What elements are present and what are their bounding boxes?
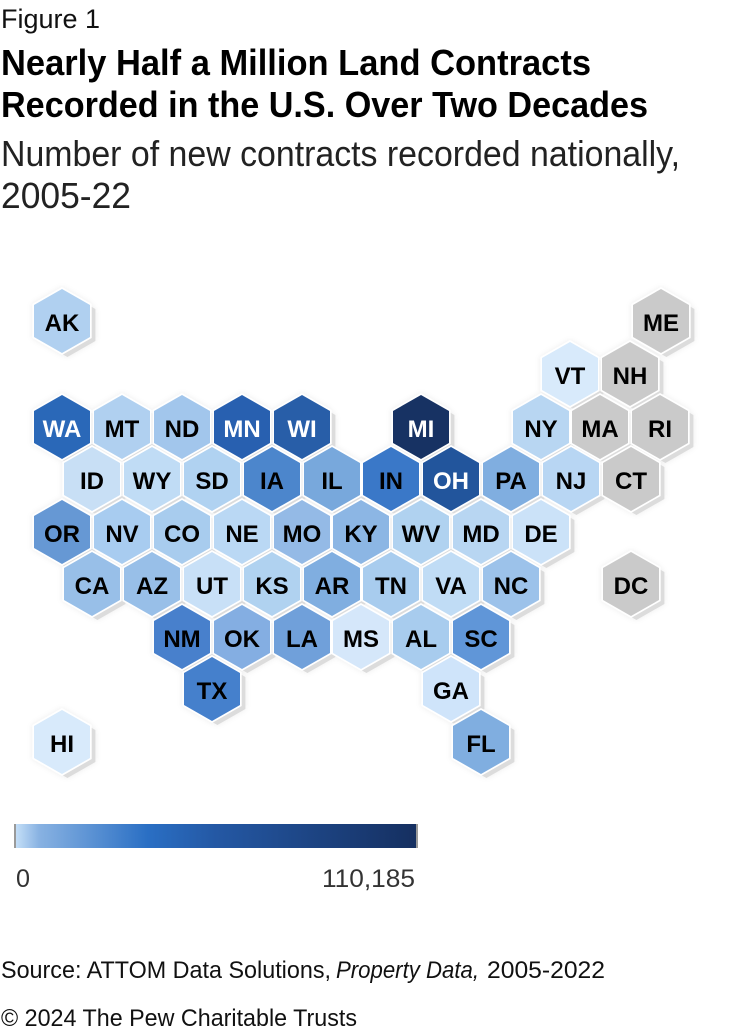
NH: NH bbox=[613, 363, 647, 390]
WY: WY bbox=[133, 468, 171, 495]
source: 2005-2022 bbox=[487, 957, 605, 984]
GA bbox=[423, 657, 484, 725]
WY bbox=[124, 447, 185, 515]
legend gradient bar bbox=[14, 824, 418, 848]
PA: PA bbox=[495, 468, 527, 495]
MA bbox=[572, 395, 633, 463]
PA bbox=[483, 447, 544, 515]
NC: NC bbox=[494, 573, 528, 600]
IA: IA bbox=[260, 468, 284, 495]
WV bbox=[393, 500, 454, 568]
HI bbox=[34, 710, 95, 778]
WV: WV bbox=[402, 521, 440, 548]
IL bbox=[304, 447, 365, 515]
HI: HI bbox=[50, 731, 74, 758]
legend maximum: 110,185 bbox=[322, 865, 415, 893]
copyright: © 2024 The Pew Charitable Trusts bbox=[1, 1005, 357, 1032]
WI: WI bbox=[287, 416, 317, 443]
AR bbox=[304, 552, 365, 620]
VT: VT bbox=[555, 363, 586, 390]
FL: FL bbox=[466, 731, 496, 758]
NM bbox=[154, 605, 215, 673]
MT: MT bbox=[105, 416, 140, 443]
ME: ME bbox=[643, 310, 679, 337]
title: Nearly Half a Million Land Contracts bbox=[1, 42, 591, 83]
MI bbox=[393, 395, 454, 463]
ME bbox=[633, 289, 694, 357]
KY: KY bbox=[344, 521, 378, 548]
LA: LA bbox=[286, 626, 318, 653]
AR: AR bbox=[315, 573, 349, 600]
MA: MA bbox=[581, 416, 619, 443]
AZ bbox=[124, 552, 185, 620]
AZ: AZ bbox=[136, 573, 168, 600]
WA bbox=[34, 395, 95, 463]
TX: TX bbox=[197, 678, 227, 705]
SC bbox=[453, 605, 514, 673]
RI bbox=[632, 395, 693, 463]
TX bbox=[184, 657, 245, 725]
ND: ND bbox=[165, 416, 199, 443]
OR: OR bbox=[44, 521, 80, 548]
CA: CA bbox=[75, 573, 109, 600]
NC bbox=[483, 552, 544, 620]
NJ bbox=[543, 447, 604, 515]
MO: MO bbox=[283, 521, 321, 548]
subtitle: Number of new contracts recorded nationally, bbox=[1, 133, 680, 174]
TN: TN bbox=[375, 573, 407, 600]
hexagon tile map bbox=[34, 289, 694, 778]
WA: WA bbox=[43, 416, 81, 443]
ID: ID bbox=[80, 468, 104, 495]
IN: IN bbox=[379, 468, 403, 495]
legend bbox=[14, 824, 418, 893]
title bbox=[1, 42, 648, 125]
source: Property Data, bbox=[336, 957, 479, 984]
MN: MN bbox=[223, 416, 261, 443]
SD: SD bbox=[195, 468, 229, 495]
IN bbox=[363, 447, 424, 515]
NY: NY bbox=[524, 416, 558, 443]
MO bbox=[274, 500, 335, 568]
VA bbox=[423, 552, 484, 620]
SD bbox=[184, 447, 245, 515]
KY bbox=[333, 500, 394, 568]
NV bbox=[94, 500, 155, 568]
CO bbox=[154, 500, 215, 568]
subtitle: 2005-22 bbox=[1, 175, 131, 216]
OR bbox=[34, 500, 95, 568]
ID bbox=[64, 447, 125, 515]
KS bbox=[244, 552, 305, 620]
ND bbox=[154, 395, 215, 463]
OK: OK bbox=[224, 626, 261, 653]
KS: KS bbox=[255, 573, 289, 600]
DE: DE bbox=[524, 521, 558, 548]
VA: VA bbox=[435, 573, 467, 600]
MD: MD bbox=[462, 521, 500, 548]
VT bbox=[542, 342, 603, 410]
GA: GA bbox=[433, 678, 469, 705]
LA bbox=[274, 605, 335, 673]
MS bbox=[333, 605, 394, 673]
title: Recorded in the U.S. Over Two Decades bbox=[1, 84, 648, 125]
DC bbox=[603, 552, 664, 620]
AL bbox=[393, 605, 454, 673]
OH bbox=[423, 447, 484, 515]
MN bbox=[214, 395, 275, 463]
OH: OH bbox=[433, 468, 469, 495]
DC: DC bbox=[614, 573, 648, 600]
DE bbox=[513, 500, 574, 568]
CT bbox=[603, 447, 664, 515]
source: Source: ATTOM Data Solutions, bbox=[1, 957, 331, 984]
OK bbox=[214, 605, 275, 673]
SC: SC bbox=[464, 626, 498, 653]
MD bbox=[453, 500, 514, 568]
CO: CO bbox=[164, 521, 200, 548]
figure label: Figure 1 bbox=[1, 4, 100, 34]
MS: MS bbox=[343, 626, 379, 653]
NJ: NJ bbox=[556, 468, 586, 495]
subtitle bbox=[1, 133, 680, 216]
FL bbox=[453, 710, 514, 778]
CA bbox=[64, 552, 125, 620]
WI bbox=[274, 395, 335, 463]
CT: CT bbox=[615, 468, 647, 495]
NM: NM bbox=[163, 626, 201, 653]
source bbox=[1, 957, 605, 984]
IL: IL bbox=[321, 468, 343, 495]
UT: UT bbox=[196, 573, 228, 600]
MT bbox=[94, 395, 155, 463]
NE bbox=[214, 500, 275, 568]
NH bbox=[602, 342, 663, 410]
AL: AL bbox=[405, 626, 437, 653]
UT bbox=[184, 552, 245, 620]
IA bbox=[244, 447, 305, 515]
RI: RI bbox=[648, 416, 672, 443]
AK bbox=[34, 289, 95, 357]
MI: MI bbox=[408, 416, 434, 443]
TN bbox=[363, 552, 424, 620]
AK: AK bbox=[45, 310, 80, 337]
legend minimum: 0 bbox=[16, 865, 30, 893]
NE: NE bbox=[225, 521, 259, 548]
NV: NV bbox=[105, 521, 139, 548]
NY bbox=[513, 395, 574, 463]
